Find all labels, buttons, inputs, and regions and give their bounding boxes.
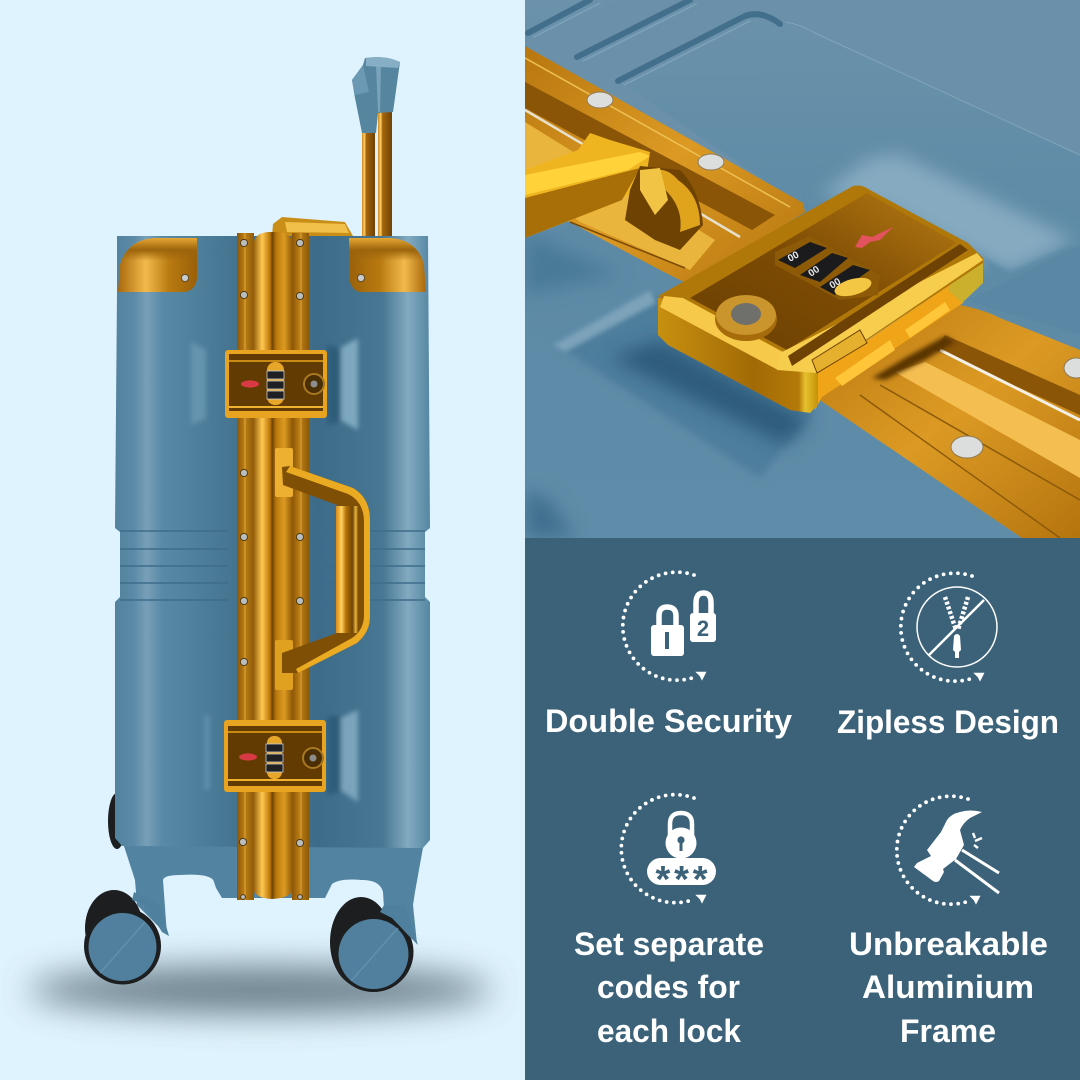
panel: pale blue background	[0, 0, 525, 1080]
moulded ribs	[120, 531, 425, 600]
rivets	[587, 92, 1080, 458]
label: set separate codes: each lock	[597, 1013, 741, 1049]
lock top rim	[658, 186, 983, 351]
label: unbreakable aluminium frame: Frame	[900, 1013, 996, 1049]
label: set separate codes	[574, 926, 764, 1049]
lower combination lock	[224, 720, 326, 792]
photo base	[525, 0, 1080, 538]
feature: unbreakable frame	[849, 796, 1048, 1049]
suitcase body	[115, 236, 430, 848]
lock dark face	[690, 193, 957, 350]
lock dials: 00	[807, 264, 822, 279]
icon: padlock and code	[621, 795, 716, 903]
central aluminium frame	[237, 232, 309, 900]
lock dials: 00	[786, 249, 802, 265]
label: set separate codes: codes for	[597, 969, 740, 1005]
upper case panel	[723, 157, 764, 180]
side handle arm	[525, 133, 703, 250]
icon: padlock and code: ***	[656, 859, 708, 901]
suitcase side view	[84, 57, 430, 992]
case ribs	[528, 0, 780, 85]
rear wheels	[85, 793, 392, 987]
bright edge bands	[660, 296, 783, 370]
icon: two padlocks: 2	[697, 616, 709, 641]
left front wheel	[84, 908, 161, 984]
lock recess shading	[191, 338, 358, 802]
top carry handle	[272, 217, 353, 236]
recessed panel shading	[824, 150, 1072, 271]
icon: hammer	[897, 796, 999, 904]
gold corner right	[349, 238, 426, 292]
label: unbreakable aluminium frame: Aluminium	[862, 969, 1034, 1005]
strap: lower right	[808, 305, 1080, 538]
lock dials: 00	[828, 276, 843, 292]
upper combination lock	[225, 350, 327, 418]
wheel housings	[122, 840, 424, 944]
lock front edge	[658, 298, 818, 413]
feature: separate codes	[574, 795, 764, 1049]
combination lock close-up	[658, 186, 983, 413]
lock side edge	[948, 263, 983, 303]
key barrel	[715, 295, 777, 341]
icon: crossed-out zipper	[901, 573, 997, 681]
label: set separate codes: Set separate	[574, 926, 764, 962]
lock dials	[775, 236, 880, 300]
label: unbreakable aluminium frame	[849, 926, 1048, 1049]
telescopic handle	[352, 57, 400, 238]
label: unbreakable aluminium frame: Unbreakable	[849, 926, 1048, 962]
lock underside gold	[815, 284, 964, 410]
label: zipless design: Zipless Design	[837, 704, 1059, 740]
label: double security: Double Security	[545, 703, 792, 739]
red logo	[855, 227, 893, 248]
wheel forks	[132, 892, 418, 945]
floor shadow	[28, 966, 492, 1014]
right front wheel	[334, 912, 414, 992]
side carry handle	[275, 448, 370, 690]
panel: lock close-up photo	[525, 0, 1080, 538]
gold corner left	[118, 238, 197, 292]
feature: double security	[545, 572, 792, 739]
feature: zipless design	[837, 573, 1059, 740]
lower recess	[525, 232, 815, 538]
strap: upper left	[525, 46, 805, 285]
icon: two padlocks	[623, 572, 716, 680]
panel: features	[525, 538, 1080, 1080]
